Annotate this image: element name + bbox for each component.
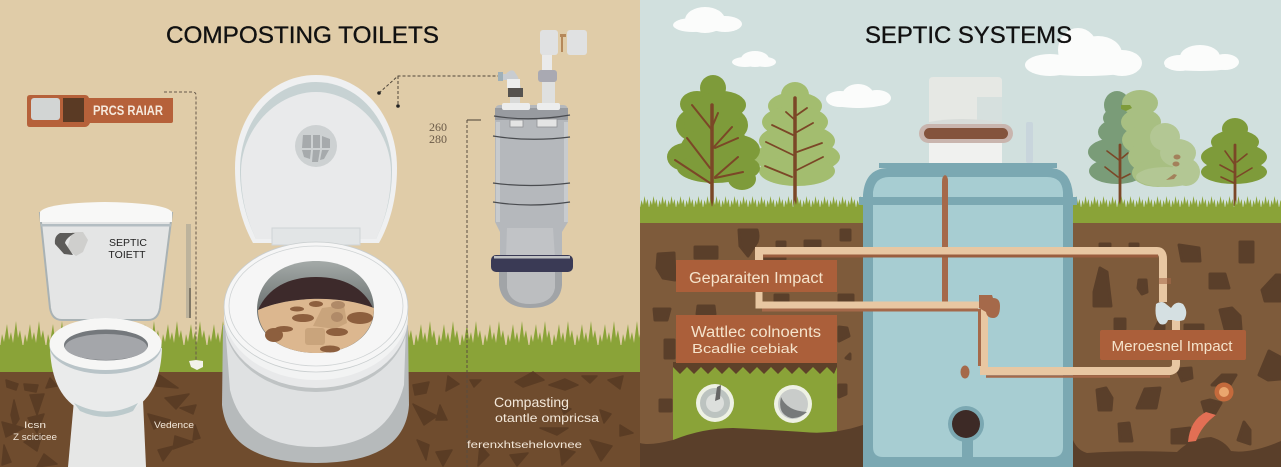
green drainage panel [673,362,837,440]
dimension numbers: 280 [429,132,447,146]
soil label left [13,420,57,443]
badge: pros label: PRCS RAIAR [93,103,163,118]
valve: small plug [960,366,970,378]
composting tank [491,30,587,308]
trees left [667,75,840,205]
compost label [467,394,599,451]
compost label: ferenxhtsehelovnee [467,439,582,451]
title: COMPOSTING TOILETS [166,22,439,49]
lid vent [295,125,337,167]
compost label: Compasting [494,394,569,410]
tank label: SEPTIC [109,237,147,249]
tree 3 [1088,91,1145,205]
soil label left: Z scicicee [13,432,57,443]
soil [0,372,640,467]
inspection riser [919,77,1033,163]
drain outlet [1188,382,1234,442]
label: water components: Bcadlie cebiak [692,341,799,356]
tank outer [863,163,1073,467]
trees right [1088,90,1267,205]
pipe network [759,251,1176,376]
soil label right: Vedence [154,420,194,431]
label: personnel impact: Meroesnel Impact [1112,338,1233,355]
seat [224,246,408,392]
outlet opening [948,406,984,457]
body [222,325,409,463]
grass [640,194,1281,223]
compost label: otantle ompricsa [495,411,599,425]
dark soil ground [640,425,1281,467]
septic tank [859,163,1077,467]
tank hoops [493,115,570,205]
tank body [495,105,568,258]
clouds [673,7,1239,108]
panel: septic systems [640,0,1281,467]
compost chamber [257,261,374,353]
vent rod [1026,122,1033,163]
soil label left: Icsn [24,420,46,431]
tank bottom dome [499,270,562,308]
middle pipe [759,290,985,310]
bowl [50,348,162,417]
lid hinge [272,228,360,245]
dimension numbers: 260 [429,120,447,134]
logo mark [55,232,88,256]
label: generation impact [676,260,837,292]
dimension numbers [429,120,447,146]
valve: pipe joint [979,295,1000,318]
septic toilet [40,202,172,467]
vertical pipe [942,175,948,302]
tank lower neck [506,228,555,258]
composting toilet [222,75,409,463]
tank [40,213,172,320]
upper pipe [759,251,1163,302]
badge: pros label [27,95,173,127]
tree 1 [667,75,760,205]
label: personnel impact [1100,330,1246,360]
upper fittings [498,30,587,105]
base [68,400,146,467]
tank band [491,255,573,272]
tree 2 [754,82,840,205]
lower pipe [980,305,1176,376]
soil [640,223,1281,467]
riser collar [919,124,1013,143]
label: water components [676,315,837,363]
grass strip [0,318,640,373]
valve: grey fitting [1156,278,1186,324]
tank flange [859,197,1077,205]
dashed leader: pros label [164,92,196,360]
title: SEPTIC SYSTEMS [865,22,1072,49]
vent pipe by septic toilet [186,224,203,370]
fitting left [696,384,734,422]
septic toilet: TOIETT [108,249,146,261]
dashed leaders to tank [379,76,498,106]
lid [235,75,397,245]
panel: composting toilets [0,0,640,467]
tree 5 [1201,118,1267,205]
label: generation impact: Geparaiten Impact [689,270,824,287]
label: water components: Wattlec colnoents [691,324,821,341]
tree 4 [1121,90,1200,187]
fitting right [774,385,812,423]
